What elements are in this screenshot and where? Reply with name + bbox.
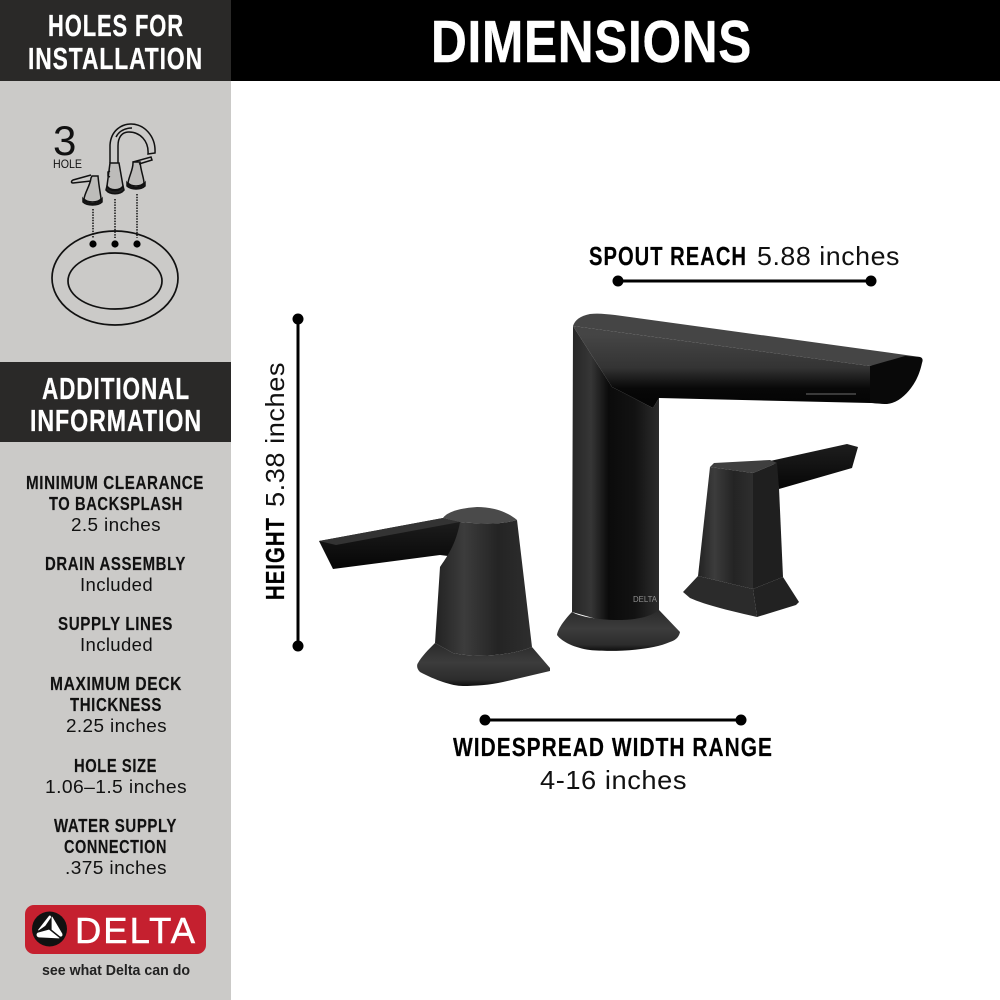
arrow: height dimension line (292, 314, 304, 652)
label: height (260, 362, 290, 600)
stem (572, 326, 659, 622)
spout top face (573, 314, 920, 366)
body right (753, 463, 783, 589)
spec: hole size (45, 756, 187, 797)
arrow: spout reach dimension line (612, 276, 876, 286)
sidebar background (0, 0, 231, 1000)
logo: delta: DELTA (75, 910, 197, 951)
image: right handle (683, 444, 858, 617)
spec: drain assembly (45, 554, 186, 595)
icon: 3 hole sink and faucet diagram (52, 117, 178, 325)
spec: supply lines (58, 614, 173, 655)
arrow: width dimension line (480, 714, 746, 726)
spout front face (573, 326, 870, 408)
aerator slot (806, 393, 856, 395)
header: additional information: ADDITIONAL (42, 371, 190, 406)
spec: minimum clearance (26, 473, 204, 535)
dome top (443, 507, 517, 524)
spec: water supply connection (54, 816, 177, 878)
logo: delta (25, 905, 206, 979)
header: dimensions (231, 0, 1000, 81)
header: holes for installation: HOLES FOR (48, 8, 184, 43)
top face (710, 460, 777, 473)
base right (753, 577, 799, 617)
spec: maximum deck thickness: MAXIMUM DECK (50, 674, 182, 694)
lever top face (319, 518, 460, 545)
base left (683, 576, 757, 617)
base (557, 610, 680, 651)
spec: water supply connection: WATER SUPPLY (54, 816, 177, 836)
label: spout reach: SPOUT REACH (589, 241, 747, 271)
spec: maximum deck thickness: THICKNESS (70, 695, 162, 715)
spec: drain assembly: Included (80, 575, 153, 595)
spec: supply lines: SUPPLY LINES (58, 614, 173, 634)
spec: maximum deck thickness (50, 674, 182, 736)
label: height: 5.38 inches (260, 362, 290, 507)
body (435, 520, 532, 656)
label: height: HEIGHT (260, 517, 290, 600)
icon: 3 hole sink and faucet diagram: 3 (53, 117, 76, 164)
image: faucet spout (557, 314, 923, 651)
header: dimensions: DIMENSIONS (431, 9, 752, 75)
spec: drain assembly: DRAIN ASSEMBLY (45, 554, 186, 574)
icon: 3 hole sink and faucet diagram: HOLE (53, 157, 82, 171)
spout nose (870, 356, 923, 404)
spec: water supply connection: .375 inches (65, 858, 167, 878)
spec: supply lines: Included (80, 635, 153, 655)
logo: delta: see what Delta can do (42, 962, 190, 979)
header: additional information (0, 362, 231, 442)
spec: minimum clearance: 2.5 inches (71, 515, 161, 535)
body left (698, 467, 753, 589)
base (417, 643, 550, 686)
spec: water supply connection: CONNECTION (64, 837, 167, 857)
header: holes for installation (0, 0, 231, 81)
engraved brand: DELTA (633, 594, 657, 604)
image: left handle (319, 507, 550, 686)
label: spout reach (589, 241, 900, 271)
spec: hole size: 1.06–1.5 inches (45, 777, 187, 797)
label: widespread width range (453, 732, 773, 795)
spec: minimum clearance: TO BACKSPLASH (49, 494, 183, 514)
header: additional information: INFORMATION (30, 403, 202, 438)
label: spout reach: 5.88 inches (757, 241, 900, 271)
spec: hole size: HOLE SIZE (74, 756, 157, 776)
header: holes for installation: INSTALLATION (28, 41, 203, 76)
lever (770, 444, 858, 489)
label: widespread width range: WIDESPREAD WIDTH RANGE (453, 732, 773, 762)
lever (319, 518, 461, 569)
spec: minimum clearance: MINIMUM CLEARANCE (26, 473, 204, 493)
label: widespread width range: 4-16 inches (540, 765, 687, 795)
spec: maximum deck thickness: 2.25 inches (66, 716, 167, 736)
